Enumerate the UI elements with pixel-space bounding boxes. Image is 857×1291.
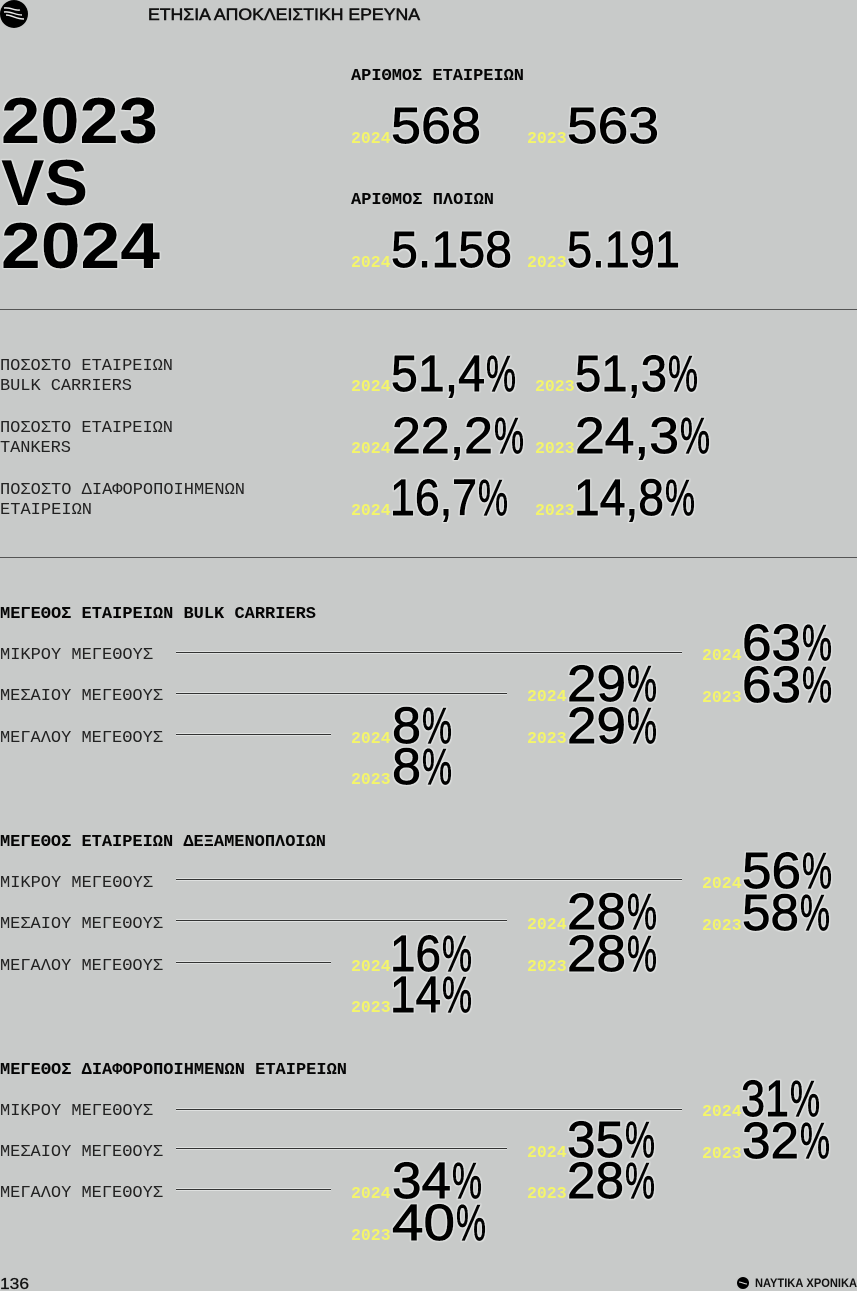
values: large: 2023 bbox=[351, 998, 391, 1017]
row: small: ΜΙΚΡΟΥ ΜΕΓΕΘΟΥΣ bbox=[0, 874, 153, 893]
main heading: 2024 bbox=[1, 209, 160, 282]
values: small: 56 bbox=[742, 842, 801, 899]
values: large: % bbox=[456, 1194, 486, 1251]
stat: ships 2023 bbox=[527, 221, 680, 278]
values: large: 2023 bbox=[351, 1226, 391, 1245]
values: large: 14 bbox=[390, 966, 441, 1023]
values: small: 2023 bbox=[702, 916, 742, 935]
section heading: ΜΕΓΕΘΟΣ ΔΙΑΦΟΡΟΠΟΙΗΜΕΝΩΝ ΕΤΑΙΡΕΙΩΝ bbox=[0, 1061, 347, 1080]
values: small: % bbox=[802, 842, 832, 899]
values: medium: 29 bbox=[567, 655, 626, 712]
values: medium bbox=[527, 883, 657, 982]
stat: companies 2023: 2023 bbox=[527, 129, 567, 148]
stat: ships 2024: 5.158 bbox=[391, 221, 512, 278]
stat: bulk 2023: % bbox=[668, 345, 698, 402]
stat: ships 2023: 5.191 bbox=[567, 221, 680, 278]
values: small: % bbox=[800, 1112, 830, 1169]
stat: companies 2024: 568 bbox=[391, 97, 481, 154]
stat: bulk 2024 bbox=[351, 345, 516, 402]
stat: tankers 2024 bbox=[351, 407, 524, 464]
stat: ships 2023: 2023 bbox=[527, 253, 567, 272]
values: large: 2023 bbox=[351, 770, 391, 789]
values: medium: 28 bbox=[567, 883, 626, 940]
stat: tankers 2023: 24,3 bbox=[575, 407, 679, 464]
stat: bulk 2024: 51,4 bbox=[391, 345, 485, 402]
footer brand bbox=[737, 1277, 857, 1290]
chart: tanker company size bbox=[0, 833, 832, 1023]
values: large: 2024 bbox=[351, 957, 391, 976]
stat: ships 2024: 2024 bbox=[351, 253, 391, 272]
row: medium: ΜΕΣΑΙΟΥ ΜΕΓΕΘΟΥΣ bbox=[0, 915, 163, 934]
values: large: % bbox=[442, 925, 472, 982]
stat: tankers 2024: 22,2 bbox=[392, 407, 493, 464]
values: small: 2023 bbox=[702, 688, 742, 707]
icon: publication logo bbox=[0, 0, 28, 28]
values: large: % bbox=[422, 738, 452, 795]
values: medium bbox=[527, 1111, 655, 1209]
values: large bbox=[351, 697, 452, 795]
values: medium: % bbox=[627, 925, 657, 982]
values: medium: 2024 bbox=[527, 915, 567, 934]
values: large: 8 bbox=[392, 697, 421, 754]
values: small bbox=[702, 842, 832, 941]
values: large: % bbox=[442, 966, 472, 1023]
values: medium: 28 bbox=[567, 925, 626, 982]
values: small: 63 bbox=[742, 614, 801, 671]
stat: diversified 2024: % bbox=[478, 469, 508, 526]
stat: bulk 2023: 51,3 bbox=[575, 345, 667, 402]
values: large: 2024 bbox=[351, 729, 391, 748]
values: large: % bbox=[452, 1152, 482, 1209]
values: small: 31 bbox=[741, 1070, 789, 1127]
row: medium: ΜΕΣΑΙΟΥ ΜΕΓΕΘΟΥΣ bbox=[0, 1143, 163, 1162]
stat: tankers 2023: % bbox=[680, 407, 710, 464]
stat: diversified 2024: 16,7 bbox=[390, 469, 477, 526]
main heading: VS bbox=[1, 146, 88, 219]
chart: diversified company size bbox=[0, 1061, 830, 1251]
values: medium: 2023 bbox=[527, 729, 567, 748]
stat: companies 2024: 2024 bbox=[351, 129, 391, 148]
stat: diversified 2024 bbox=[351, 469, 508, 526]
stat: companies 2023 bbox=[527, 97, 659, 154]
values: medium bbox=[527, 655, 657, 754]
values: small: % bbox=[800, 884, 830, 941]
section heading: ΜΕΓΕΘΟΣ ΕΤΑΙΡΕΙΩΝ ΔΕΞΑΜΕΝΟΠΛΟΙΩΝ bbox=[0, 833, 326, 852]
values: large: % bbox=[422, 697, 452, 754]
values: medium: % bbox=[627, 883, 657, 940]
label: bulk carriers share: BULK CARRIERS bbox=[0, 377, 132, 396]
panel: company share percentages bbox=[0, 345, 710, 526]
values: small: 2024 bbox=[702, 1102, 742, 1121]
stat: diversified 2023 bbox=[535, 469, 695, 526]
label: tankers share bbox=[0, 419, 173, 458]
stat: companies 2023: 563 bbox=[567, 97, 659, 154]
values: medium: % bbox=[625, 1152, 655, 1209]
stat: tankers 2024: 2024 bbox=[351, 439, 391, 458]
panel: company and ship counts bbox=[351, 67, 680, 278]
main heading: 2023 bbox=[1, 84, 158, 157]
values: large bbox=[351, 1152, 486, 1251]
row: small: ΜΙΚΡΟΥ ΜΕΓΕΘΟΥΣ bbox=[0, 646, 153, 665]
values: large: 16 bbox=[390, 925, 441, 982]
stat: diversified 2023: 14,8 bbox=[574, 469, 664, 526]
values: small: % bbox=[802, 614, 832, 671]
stat: tankers 2023 bbox=[535, 407, 710, 464]
main heading bbox=[1, 84, 160, 282]
row: large: ΜΕΓΑΛΟΥ ΜΕΓΕΘΟΥΣ bbox=[0, 729, 163, 748]
values: small: 58 bbox=[742, 884, 799, 941]
label: diversified share bbox=[0, 481, 245, 520]
values: medium: 2023 bbox=[527, 1184, 567, 1203]
values: medium: % bbox=[625, 1111, 655, 1168]
label: diversified share: ΠΟΣΟΣΤΟ ΔΙΑΦΟΡΟΠΟΙΗΜΕΝΩΝ bbox=[0, 481, 245, 500]
row: small: ΜΙΚΡΟΥ ΜΕΓΕΘΟΥΣ bbox=[0, 1102, 153, 1121]
values: small: % bbox=[790, 1070, 820, 1127]
values: large: 34 bbox=[392, 1152, 451, 1209]
values: medium: 29 bbox=[567, 697, 626, 754]
row: medium: ΜΕΣΑΙΟΥ ΜΕΓΕΘΟΥΣ bbox=[0, 687, 163, 706]
label: diversified share: ΕΤΑΙΡΕΙΩΝ bbox=[0, 501, 92, 520]
stat: bulk 2023: 2023 bbox=[535, 377, 575, 396]
stat: diversified 2024: 2024 bbox=[351, 501, 391, 520]
section heading: ΜΕΓΕΘΟΣ ΕΤΑΙΡΕΙΩΝ BULK CARRIERS bbox=[0, 605, 316, 624]
chart: bulk carriers company size bbox=[0, 605, 832, 795]
heading: number of companies: ΑΡΙΘΜΟΣ ΕΤΑΙΡΕΙΩΝ bbox=[351, 67, 524, 86]
label: tankers share: TANKERS bbox=[0, 439, 71, 458]
values: large: 40 bbox=[392, 1194, 455, 1251]
values: medium: % bbox=[627, 697, 657, 754]
stat: diversified 2023: 2023 bbox=[535, 501, 575, 520]
label: bulk carriers share bbox=[0, 357, 173, 396]
stat: bulk 2024: % bbox=[486, 345, 516, 402]
heading: number of ships: ΑΡΙΘΜΟΣ ΠΛΟΙΩΝ bbox=[351, 191, 494, 210]
stat: tankers 2023: 2023 bbox=[535, 439, 575, 458]
values: medium: 2023 bbox=[527, 957, 567, 976]
values: large bbox=[351, 925, 472, 1023]
values: small: 2024 bbox=[702, 646, 742, 665]
stat: diversified 2023: % bbox=[665, 469, 695, 526]
values: large: 8 bbox=[392, 738, 421, 795]
values: small bbox=[702, 614, 832, 713]
values: large: 2024 bbox=[351, 1184, 391, 1203]
label: bulk carriers share: ΠΟΣΟΣΤΟ ΕΤΑΙΡΕΙΩΝ bbox=[0, 357, 173, 376]
stat: bulk 2023 bbox=[535, 345, 698, 402]
row: large: ΜΕΓΑΛΟΥ ΜΕΓΕΘΟΥΣ bbox=[0, 957, 163, 976]
icon: footer logo bbox=[737, 1277, 749, 1289]
values: medium: 2024 bbox=[527, 687, 567, 706]
values: small: 32 bbox=[742, 1112, 799, 1169]
stat: tankers 2024: % bbox=[494, 407, 524, 464]
values: medium: 35 bbox=[567, 1111, 624, 1168]
values: medium: 2024 bbox=[527, 1143, 567, 1162]
values: small bbox=[702, 1070, 830, 1169]
values: small: 63 bbox=[742, 656, 801, 713]
row: large: ΜΕΓΑΛΟΥ ΜΕΓΕΘΟΥΣ bbox=[0, 1184, 163, 1203]
values: medium: % bbox=[627, 655, 657, 712]
stat: bulk 2024: 2024 bbox=[351, 377, 391, 396]
header title: ΕΤΗΣΙΑ ΑΠΟΚΛΕΙΣΤΙΚΗ ΕΡΕΥΝΑ bbox=[148, 6, 420, 24]
label: tankers share: ΠΟΣΟΣΤΟ ΕΤΑΙΡΕΙΩΝ bbox=[0, 419, 173, 438]
values: small: 2024 bbox=[702, 874, 742, 893]
values: small: % bbox=[802, 656, 832, 713]
values: medium: 28 bbox=[567, 1152, 624, 1209]
values: small: 2023 bbox=[702, 1144, 742, 1163]
stat: companies 2024 bbox=[351, 97, 481, 154]
